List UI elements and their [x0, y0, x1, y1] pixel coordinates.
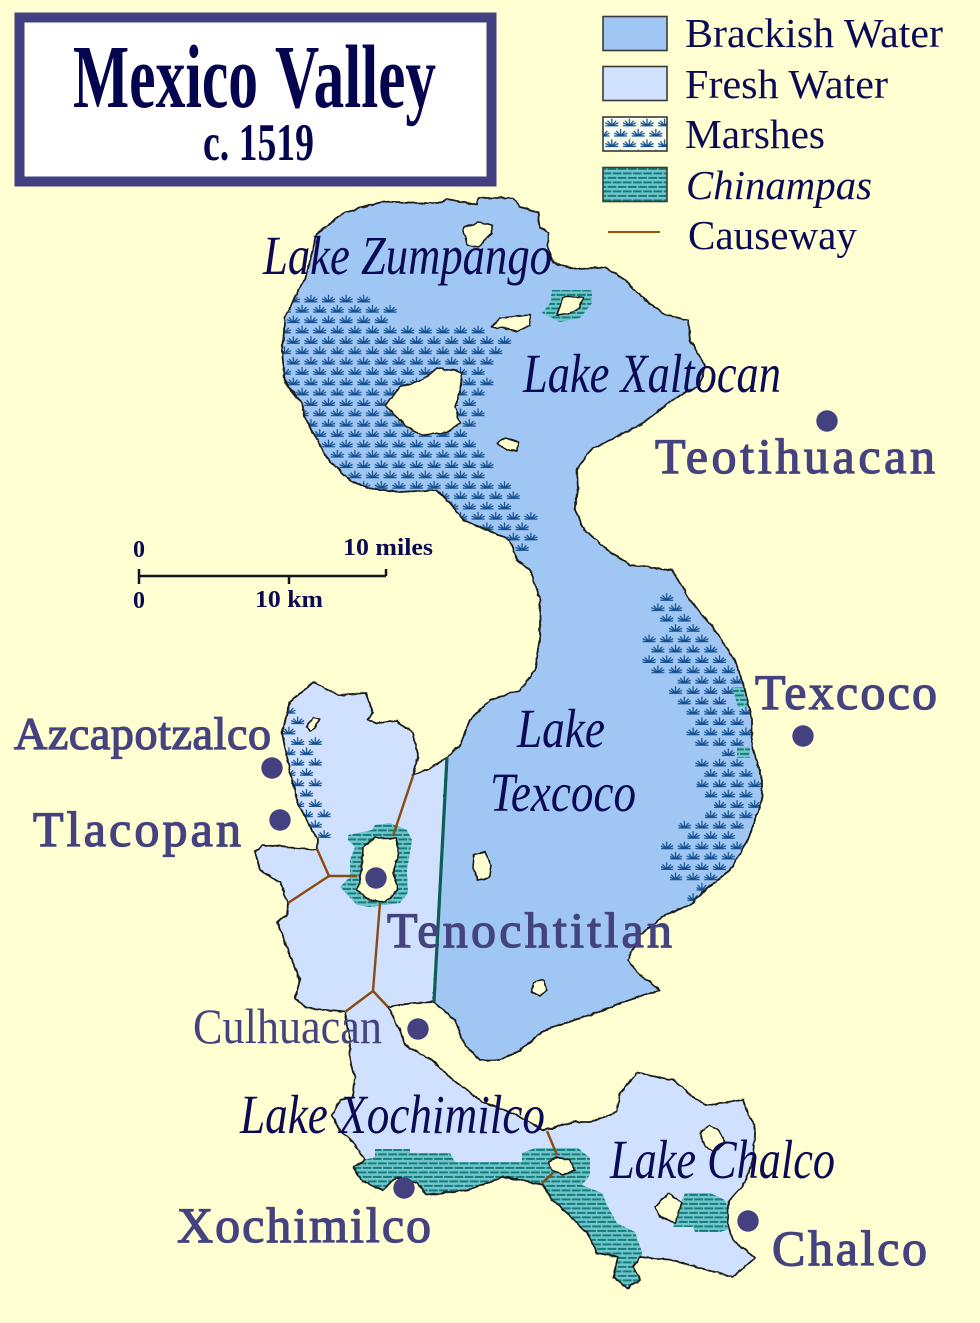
legend swatch: brackish water	[603, 16, 667, 50]
title: Mexico Valley: Valley	[275, 28, 436, 127]
label: Lake Zumpango: Lake Zumpango	[262, 225, 552, 286]
legend label: fresh water: Fresh Water	[685, 61, 888, 107]
marshes: western Lake Mexico	[283, 706, 331, 838]
chinampas: Lake Chalco	[673, 1193, 728, 1232]
lake: brackish water (Zumpango, Xaltocan, Texcoco)	[282, 198, 762, 1060]
label: Lake Texcoco line 2: Texcoco	[490, 762, 636, 823]
label: Chalco: Chalco	[772, 1220, 927, 1276]
chinampas: Lake Xochimilco	[340, 1148, 643, 1295]
label: Culhuacan: Culhuacan	[193, 998, 382, 1054]
legend swatch: chinampas	[603, 168, 667, 202]
label: Lake Xaltocan: Lake Xaltocan	[522, 343, 781, 404]
chinampas: Texcoco shore	[732, 687, 750, 758]
legend swatch: causeway	[608, 231, 660, 233]
scale label: 10 km: 10 km	[255, 587, 323, 613]
legend label: marshes: Marshes	[685, 111, 825, 157]
lake: fresh water (Mexico, Xochimilco, Chalco)	[255, 682, 755, 1288]
legend swatch: fresh water	[603, 66, 667, 100]
label: Teotihuacan: Teotihuacan	[655, 428, 935, 484]
title panel	[20, 18, 492, 182]
vegetation layer	[280, 290, 764, 1295]
legend label: chinampas: Chinampas	[686, 162, 872, 208]
shoreline: brackish lakes	[282, 198, 762, 1060]
subtitle: c. 1519: c. 1519	[203, 114, 314, 172]
scale label: 10 miles: 10 miles	[343, 535, 433, 561]
shoreline: fresh lakes	[255, 682, 755, 1288]
lake water fills	[255, 198, 762, 1288]
chinampas: around Tenochtitlan	[340, 823, 412, 907]
label: Lake Chalco: Lake Chalco	[609, 1129, 835, 1190]
chinampas: Lake Xaltocan island	[542, 290, 592, 322]
map of the lakes	[255, 198, 764, 1295]
marshes: northern lakes	[280, 293, 540, 552]
islands	[307, 222, 725, 1223]
scale label: miles zero: 0	[133, 537, 145, 563]
legend swatch: marshes	[603, 117, 667, 151]
scale label: km zero: 0	[133, 588, 145, 614]
shorelines and islands	[255, 198, 762, 1288]
scale bar	[133, 535, 433, 614]
dike separating fresh and brackish water	[434, 757, 447, 1002]
label: Lake Texcoco line 1: Lake	[516, 698, 605, 759]
title: Mexico Valley: Mexico	[73, 28, 258, 127]
marshes: eastern Lake Texcoco	[642, 592, 764, 902]
city markers	[261, 410, 838, 1232]
label: Texcoco: Texcoco	[755, 664, 937, 720]
label: Xochimilco: Xochimilco	[177, 1197, 431, 1253]
label: Tenochtitlan: Tenochtitlan	[387, 902, 672, 958]
label: Tlacopan: Tlacopan	[33, 801, 241, 857]
causeways	[288, 776, 557, 1183]
label: Lake Xochimilco: Lake Xochimilco	[239, 1084, 545, 1145]
label: Azcapotzalco: Azcapotzalco	[14, 708, 271, 759]
legend label: brackish water: Brackish Water	[685, 10, 943, 56]
legend	[603, 10, 943, 258]
legend label: causeway: Causeway	[688, 212, 857, 258]
